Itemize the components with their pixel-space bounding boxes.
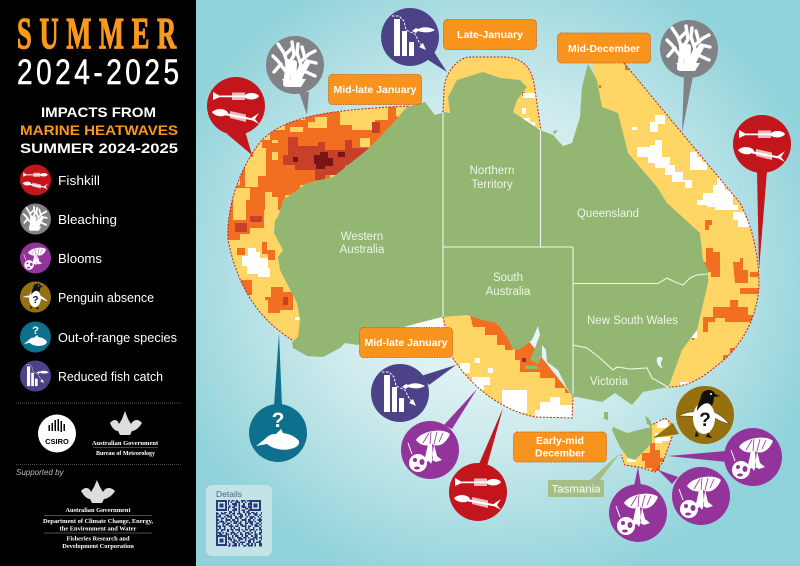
legend item: bleaching: Bleaching [58,212,117,227]
state labels: Australia [340,244,385,256]
heat patches: east [632,115,750,388]
heat map intensity patches [225,64,760,420]
legend item: out-of-range species [20,322,177,352]
dashed heatwave zone outlines [228,57,759,472]
state labels [340,165,678,388]
Tasmania [612,427,652,460]
QR code panel: Details [216,489,242,499]
callout: blooms, Tasmania south-east [658,467,730,525]
callout: out-of-range species, south-west [249,333,307,462]
islands [525,130,652,426]
Australian Government crest: supporting departments: the Environment and Water [60,526,136,532]
CSIRO logo: CSIRO [45,437,69,446]
legend item: reduced fish catch: Reduced fish catch [58,369,163,384]
state labels: Victoria [590,376,629,388]
Australian Government crest: supporting departments: Fisheries Research and [66,536,130,542]
callout: reduced fish catch, north [381,8,447,72]
sidebar title: 2024-2025 [17,52,183,92]
state borders [443,113,708,394]
Australian Government crest: supporting departments: Department of Climate Change, Energy, [43,518,153,525]
label: Mid-December: Mid-December [568,44,640,55]
heat patches: west [237,242,293,313]
callout: fishkill, north-west [207,77,265,155]
legend item: blooms [20,242,102,274]
map of Australia [274,64,708,460]
callout: blooms, Tasmania east [668,428,782,486]
callout: reduced fish catch, south [371,364,456,422]
label: Mid-late January (north-west) [328,74,422,104]
legend item: reduced fish catch [20,360,163,392]
label: Late-January [444,20,536,50]
Australian Government crest: supporting departments: Australian Government [65,507,131,514]
callout: fishkill, east [733,115,791,270]
supported by: Supported by [16,468,65,477]
label: Early-mid December [514,432,606,462]
QR code [216,501,262,546]
Australian Government crest: Bureau of Meteorology: Bureau of Meteorology [96,451,155,457]
state labels: New South Wales [587,315,678,327]
Australian Government crest: Bureau of Meteorology: Australian Government [92,440,159,447]
left sidebar panel [0,0,196,566]
severe heat: north-west [225,106,398,240]
label: Tasmania [548,453,620,497]
lake detail [657,357,663,368]
legend item: bleaching [20,204,117,234]
legend item: fishkill [20,164,100,196]
legend item: penguin absence: Penguin absence [58,290,154,305]
sidebar subtitle: IMPACTS FROM [41,104,156,120]
sidebar subtitle: SUMMER 2024-2025 [20,140,178,156]
state labels: Australia [486,286,531,298]
Tasmania heat zone [621,418,672,472]
label: Mid-late January (north-west): Mid-late January [334,85,417,96]
legend item: out-of-range species: Out-of-range species [58,330,177,345]
callout: blooms, Tasmania south [609,467,667,542]
callout: blooms, south [401,389,477,479]
label: Early-mid December: Early-mid [536,436,584,447]
label: Mid-late January (south) [360,328,452,358]
ocean background [196,0,800,566]
bight white patch [407,316,443,328]
Australian Government crest: Bureau of Meteorology [92,411,159,457]
callout: penguin absence, Tasmania [653,386,734,444]
label: Early-mid December: December [535,448,585,460]
Australian Government crest: supporting departments [43,480,153,550]
label: Mid-December [558,33,650,63]
sidebar subtitle [20,104,178,156]
callout: bleaching, north-west [266,36,324,115]
CSIRO logo [38,414,76,452]
legend item: penguin absence [20,282,154,312]
sidebar title [17,9,184,92]
label: Mid-late January (south): Mid-late January [364,338,448,349]
sidebar title: SUMMER [17,9,184,58]
heat patches: north [522,76,533,96]
state labels: Queensland [577,208,639,220]
state labels: Northern [470,165,514,177]
heat map base: marine heatwave zones [228,57,759,418]
Australian Government crest: supporting departments: Development Corporation [62,543,134,550]
callout: bleaching, east [660,20,718,133]
state labels: South [493,272,523,284]
state labels: Western [341,231,383,243]
legend item: blooms: Blooms [58,251,102,266]
QR code panel [206,485,272,556]
label: Late-January: Late-January [457,30,523,41]
state labels: Territory [471,179,513,191]
sidebar subtitle: MARINE HEATWAVES [20,122,178,138]
callout: fishkill, south [449,408,507,521]
legend item: fishkill: Fishkill [58,173,100,188]
heat patches: south [470,314,575,393]
legend [20,164,177,392]
label: Tasmania: Tasmania [552,484,601,496]
